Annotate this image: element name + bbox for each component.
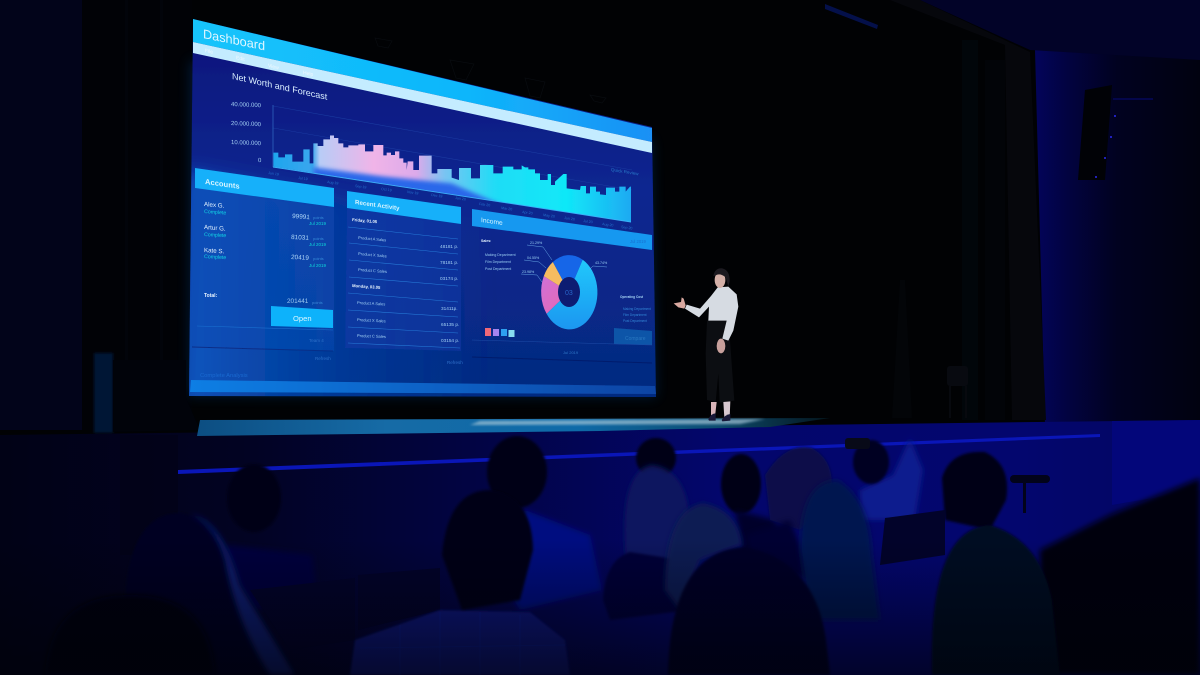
hair <box>713 268 730 287</box>
income date: Jul 2019 <box>630 239 647 244</box>
account rows: points <box>313 215 324 220</box>
menu strip <box>193 42 652 153</box>
chart x axis labels: Sep 20 <box>621 225 633 231</box>
account rows: Complete <box>204 254 226 261</box>
sales legend: Sales: <box>481 239 491 243</box>
accounts panel body <box>192 188 334 351</box>
activity list text: 65135 p. <box>441 322 459 327</box>
right stage wall panel <box>1112 420 1200 505</box>
person left <box>218 464 318 610</box>
menu labels: Edit <box>236 55 245 63</box>
operating cost legend: Making Department <box>623 307 651 311</box>
account rows: Alex G. <box>204 201 225 210</box>
left wall <box>0 0 95 430</box>
seat backs <box>250 510 945 650</box>
sales legend: Making Department <box>485 253 516 257</box>
person centre <box>487 436 602 610</box>
chart x axis labels: Feb 20 <box>479 202 491 208</box>
income date footer: Jul 2019 <box>563 350 579 355</box>
account rows: Complete <box>204 209 227 217</box>
person with camera <box>845 438 923 520</box>
right side dark seats <box>1040 478 1200 675</box>
account rows <box>204 201 327 268</box>
accounts total: points <box>312 300 323 305</box>
person grey hair <box>665 503 742 610</box>
chart y axis labels <box>231 102 262 164</box>
right curtain folds <box>892 40 1005 420</box>
ceiling wedge <box>920 0 1200 60</box>
color legend swatches <box>485 328 514 337</box>
foreground darkening <box>0 540 1200 675</box>
recent activity body <box>345 208 461 351</box>
income heading: Income <box>481 217 503 227</box>
activity list text: Friday, 01.05 <box>352 217 378 224</box>
donut chart <box>541 255 597 329</box>
spotlit floor highlight <box>470 419 765 425</box>
chart y axis labels: 10.000.000 <box>231 140 262 147</box>
menu labels <box>205 48 313 78</box>
sales legend: Post Department <box>485 267 511 271</box>
person front right <box>932 525 1060 675</box>
person in plaid shirt <box>350 490 570 675</box>
person body under hair <box>603 552 690 620</box>
activity list text: 03174 p. <box>440 276 458 281</box>
chart x axis labels: Jul 19 <box>298 176 308 181</box>
accounts total: Total: <box>204 293 218 299</box>
dark head, far left corner <box>45 595 215 675</box>
team label: Team 4 <box>309 338 324 343</box>
header bar <box>193 19 652 142</box>
audience: front row <box>45 490 1060 675</box>
donut percentage labels: 43.74% <box>595 261 608 265</box>
sales legend: Film Department <box>485 260 511 264</box>
chart x axis labels: Apr 20 <box>522 210 533 215</box>
activity list text: 78181 p. <box>440 260 458 265</box>
face <box>715 272 725 288</box>
open button <box>271 306 333 328</box>
accounts header <box>195 168 334 207</box>
bottom status bar <box>190 380 656 394</box>
menu labels: File <box>205 48 213 56</box>
stage pillar <box>94 353 113 433</box>
ankles and shoes <box>708 401 730 421</box>
accounts heading: Accounts <box>205 177 240 191</box>
account rows: Jul 2019 <box>309 263 327 268</box>
chart x axis labels: Jul 20 <box>583 219 593 224</box>
activity list text: Product X Sales <box>358 251 387 258</box>
activity list text <box>352 217 459 343</box>
net worth area chart <box>272 133 633 223</box>
operating cost legend: Film Department <box>623 313 647 317</box>
quick review link: Quick Review <box>611 167 639 176</box>
audience: back row <box>218 436 1007 610</box>
chart x axis labels: Jun 19 <box>268 171 279 176</box>
donut percentage labels: 21.29% <box>530 241 543 245</box>
stool on stage <box>947 366 968 418</box>
chart x axis labels: Jan 20 <box>455 196 466 201</box>
compare button: Compare <box>625 336 646 342</box>
recent activity heading: Recent Activity <box>355 199 400 212</box>
activity list text: Product X Sales <box>357 317 386 324</box>
right auditorium wall <box>1035 50 1200 425</box>
menu labels: Help <box>303 70 313 78</box>
account rows: Jul 2019 <box>309 242 327 247</box>
proscenium frame <box>890 0 1046 420</box>
account rows: Jul 2019 <box>309 221 327 226</box>
chart x axis labels: Mar 20 <box>501 206 512 212</box>
compare button <box>614 328 652 345</box>
account rows: 81031 <box>291 234 309 242</box>
account rows: Kate S. <box>204 247 225 255</box>
ceiling blue light strip <box>825 4 878 29</box>
donut percentage labels <box>521 241 608 282</box>
dashboard title: Dashboard <box>203 26 265 53</box>
activity list text: 31411p. <box>441 306 458 311</box>
panel: accounts <box>192 168 334 351</box>
account rows: 99991 <box>292 213 311 221</box>
income header <box>472 209 652 250</box>
ceiling spotlights <box>375 38 606 103</box>
chart title: Net Worth and Forecast <box>232 71 328 102</box>
open button: Open <box>293 314 312 323</box>
panel: recent activity <box>345 191 461 351</box>
activity list text: 03154 p. <box>441 338 459 343</box>
left side screen brightening <box>189 164 464 396</box>
chart x axis labels: Nov 19 <box>407 190 419 196</box>
activity list text: Product C Sales <box>357 333 386 339</box>
donut chart: 03 <box>565 290 573 297</box>
left stage curtain <box>82 0 192 430</box>
menu labels: View <box>268 63 279 71</box>
complete analysis link: Complete Analysis <box>200 373 248 379</box>
chart y axis labels: 40.000.000 <box>231 102 262 109</box>
operating cost legend <box>620 295 651 323</box>
left wall panel shadow <box>120 435 178 555</box>
speaker monitor block <box>113 360 200 432</box>
trousers <box>706 321 734 403</box>
account rows: 20419 <box>291 254 309 262</box>
presenter <box>674 268 738 421</box>
activity list text: Product A Sales <box>357 300 385 306</box>
panel: income <box>472 209 652 363</box>
wall speaker with indicator lights <box>1078 85 1153 180</box>
lower hand <box>717 339 725 353</box>
stage floor <box>197 418 830 436</box>
activity list text: 48181 p. <box>440 244 458 249</box>
microphone on stand <box>1010 475 1050 513</box>
presenting hand <box>674 297 686 309</box>
chart x axis labels: Sep 19 <box>355 184 367 190</box>
person front centre <box>668 547 830 675</box>
accounts refresh link: Refresh <box>315 356 331 361</box>
stage wall light line <box>178 434 1100 474</box>
chart gridlines <box>273 105 632 190</box>
sales legend <box>481 239 516 271</box>
activity list text: Product A Sales <box>358 235 386 242</box>
accounts total <box>204 293 323 305</box>
recent activity header <box>347 191 461 224</box>
chart x axis labels: May 20 <box>543 213 555 219</box>
donut percentage labels: 04.55% <box>527 256 540 260</box>
chart x axis labels <box>268 171 633 231</box>
account rows: Complete <box>204 232 226 239</box>
screen surface <box>189 19 656 397</box>
person wavy hair <box>745 447 832 580</box>
operating cost legend: Operating Cost <box>620 295 644 299</box>
chart y axis labels: 20.000.000 <box>231 121 262 128</box>
person curly hair right <box>942 452 1007 530</box>
projection screen <box>180 19 656 405</box>
person dark head right <box>721 454 780 565</box>
person blue long hair left <box>624 465 690 590</box>
chart x axis labels: Oct 19 <box>381 187 392 192</box>
chart x axis labels: Jun 20 <box>564 216 575 221</box>
activity list text: Monday, 03.05 <box>352 283 381 290</box>
white sweater <box>685 287 738 341</box>
activity refresh link: Refresh <box>447 360 463 365</box>
account rows: points <box>313 256 324 261</box>
audience: middle row <box>603 465 880 620</box>
stage front wall <box>0 420 1200 675</box>
account rows: points <box>313 236 324 241</box>
chart x axis labels: Aug 19 <box>327 180 339 186</box>
accounts total: 201441 <box>287 298 309 305</box>
account rows: Artur G. <box>204 224 226 233</box>
chart y axis labels: 0 <box>258 158 262 164</box>
screen glow <box>189 60 656 397</box>
chart x axis labels: Dec 19 <box>431 193 443 199</box>
operating cost legend: Post Department <box>623 319 647 323</box>
woman with long hair, far left <box>50 513 300 675</box>
person blue hair centre <box>800 480 880 620</box>
activity list rows <box>348 227 460 348</box>
activity list text: Product C Sales <box>358 267 387 274</box>
person far dark head <box>636 438 676 478</box>
donut percentage labels: 23.98% <box>522 270 535 274</box>
chart x axis labels: Aug 20 <box>602 222 614 228</box>
